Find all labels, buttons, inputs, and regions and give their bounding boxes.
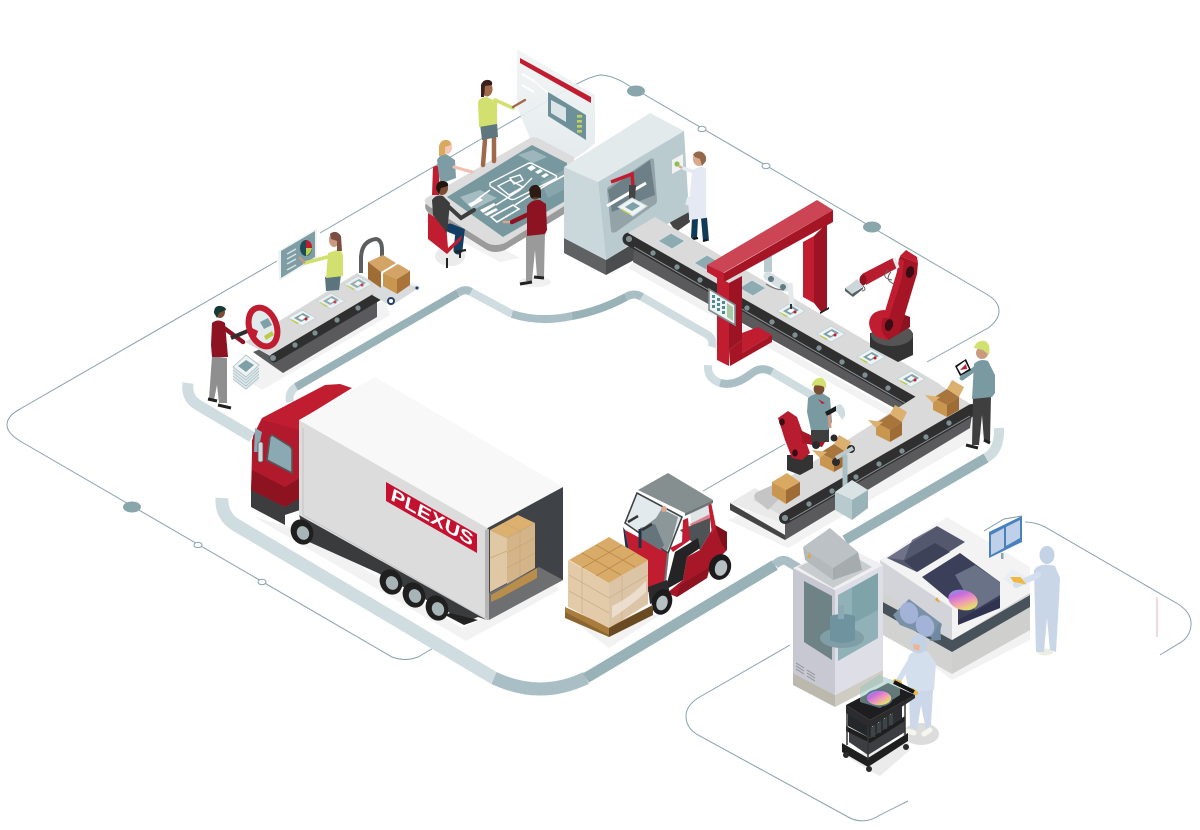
wafer cassette drums [893, 599, 942, 641]
wrapped pallet of boxes [565, 537, 653, 637]
keypad panel on gantry [709, 289, 735, 325]
black wafer cart [842, 675, 915, 776]
floor shadows [235, 208, 1030, 680]
brand logo on trailer: PLEXUS [391, 483, 473, 552]
stack of printed sheets [233, 355, 259, 390]
person: man in red sweater at table [503, 185, 551, 287]
closed box on belt [772, 473, 800, 504]
forklift [623, 473, 734, 617]
box in gripper station [812, 434, 868, 520]
platform edge bands [188, 290, 999, 689]
holographic design panel [517, 50, 595, 165]
circuit drawing on table [475, 163, 567, 222]
truck wheels [287, 516, 452, 624]
person: red shirt inspector with magnifier [208, 304, 283, 408]
red robot arm at upper conveyor [845, 250, 918, 362]
person: blonde woman at table [432, 140, 472, 195]
design table [425, 137, 574, 252]
truck cargo pallet [490, 515, 537, 602]
left inspection conveyor [245, 273, 384, 373]
person: cleanroom operator with cart [895, 634, 939, 745]
machine: design tester [564, 113, 690, 275]
person: lab coat technician [679, 151, 707, 241]
upper conveyor with circuit boards [626, 217, 942, 414]
lower box conveyor [730, 380, 972, 540]
cabinet hood [803, 528, 862, 580]
hand trolley with boxes [361, 239, 421, 306]
person: helmet worker with tablet, upper [955, 341, 995, 448]
person: woman pointing at chart [299, 232, 343, 291]
monitor [984, 516, 1022, 559]
route nodes [123, 86, 881, 585]
person: seated man on red chair [428, 181, 474, 268]
red robot arm at packing [778, 411, 825, 475]
sensor post cube [835, 480, 868, 520]
white robot under gantry [766, 252, 792, 309]
person: cleanroom operator at machine [1012, 546, 1060, 656]
wafer inspection machine [880, 516, 1030, 674]
person: helmet worker with tablet, lower [807, 378, 836, 442]
delivery truck [251, 377, 563, 625]
person: woman pointing at panel [478, 80, 525, 165]
analytics chart panel [278, 228, 317, 281]
tall wafer process cabinet [793, 528, 883, 707]
magnifying glass [243, 304, 283, 350]
red gantry frame [707, 200, 833, 366]
